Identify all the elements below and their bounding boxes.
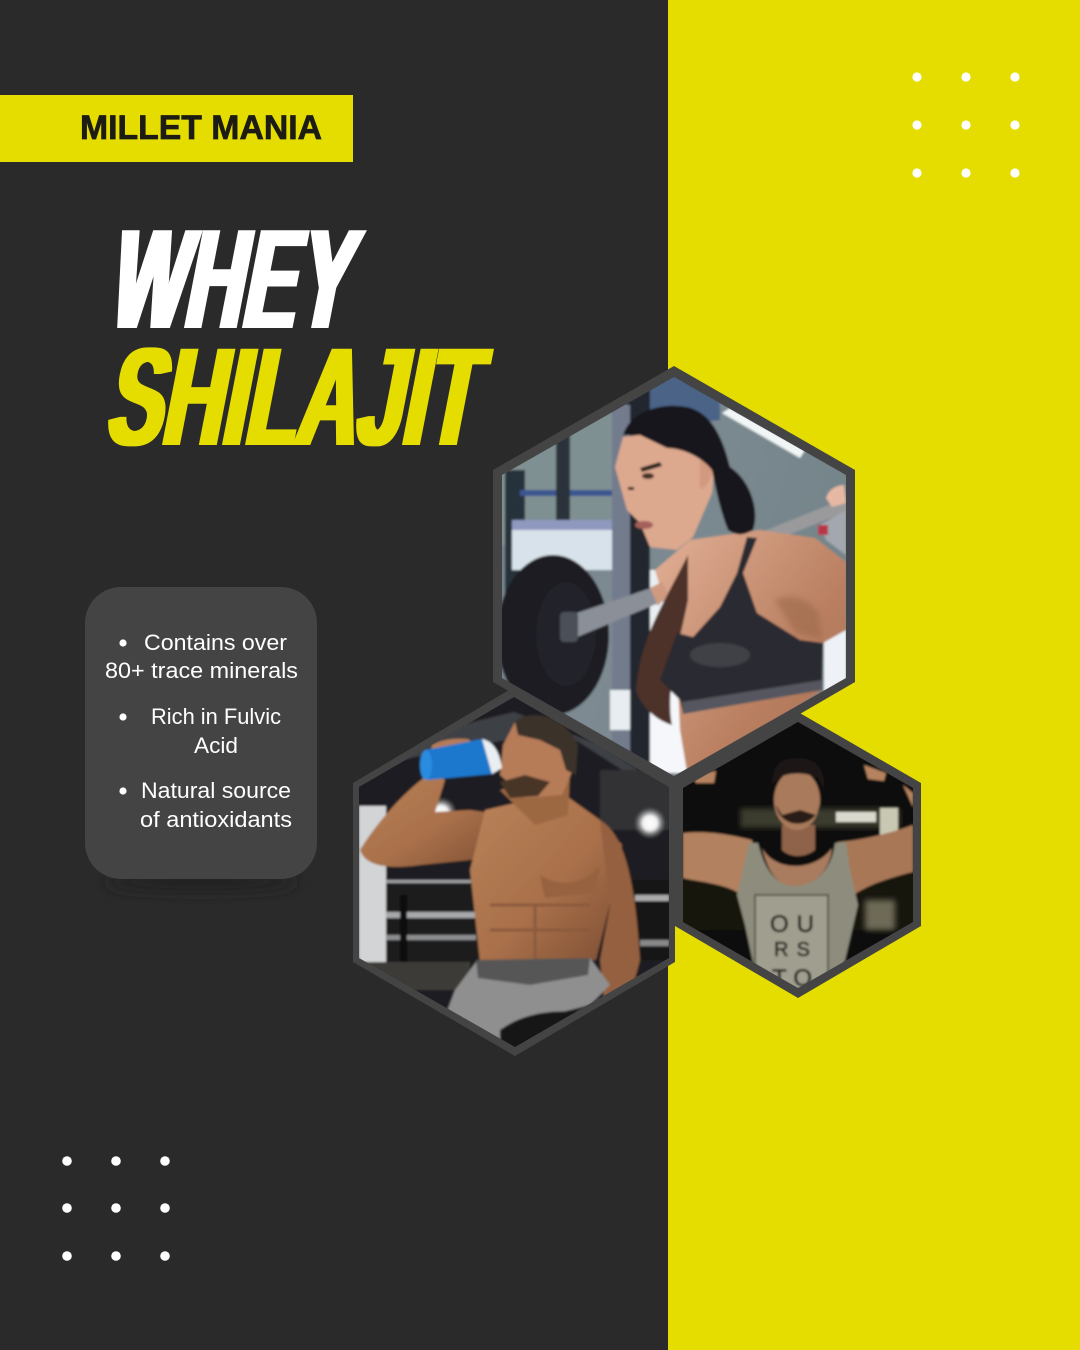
title: WHEY: WHEY [100, 199, 372, 358]
shaker bottle [420, 739, 502, 780]
benefit 3 [119, 778, 292, 832]
benefit 1: Contains over [144, 630, 287, 655]
hand [430, 736, 472, 750]
benefits panel shadow [106, 873, 296, 891]
ponytail [636, 555, 688, 725]
raised arm [359, 776, 486, 869]
background: dark panel [0, 0, 668, 1350]
shirt print: TO [772, 965, 812, 992]
benefits panel [85, 587, 317, 879]
neck and head [500, 770, 570, 825]
body [655, 530, 846, 790]
benefit 3: of antioxidants [140, 807, 292, 832]
benefit 1: 80+ trace minerals [105, 658, 298, 683]
torso [470, 795, 622, 962]
benefit 1 [105, 630, 298, 683]
arms [683, 830, 754, 894]
shirt print [755, 895, 828, 992]
right arm [600, 820, 640, 1008]
neck and head [782, 825, 815, 856]
title: SHILAJIT: SHILAJIT [98, 318, 498, 475]
shirt print: OU [770, 911, 814, 938]
hair [623, 406, 755, 534]
dot grid: top right [912, 72, 1020, 178]
tank top [734, 840, 860, 971]
benefit 3: Natural source [141, 778, 291, 803]
hexagon photo: man flexing in tank top [675, 712, 921, 998]
seat [498, 1010, 574, 1046]
face [615, 430, 716, 550]
hexagon photo: man drinking from shaker [353, 687, 675, 1060]
benefit 2 [119, 704, 281, 758]
brand banner [0, 95, 353, 162]
benefit 2: Acid [194, 733, 238, 758]
barbell plate [497, 555, 609, 715]
hexagon photo: woman lifting barbell [493, 366, 855, 790]
raised fists [692, 765, 913, 807]
sports bra [660, 537, 823, 713]
benefit 2: Rich in Fulvic [151, 704, 281, 729]
barbell shoulder [766, 503, 846, 534]
sweatpants [440, 958, 610, 1045]
brand banner: MILLET MANIA [80, 109, 322, 147]
shirt print: RS [774, 939, 810, 961]
background: yellow panel [668, 0, 1080, 1350]
dot grid: bottom left [62, 1156, 170, 1261]
